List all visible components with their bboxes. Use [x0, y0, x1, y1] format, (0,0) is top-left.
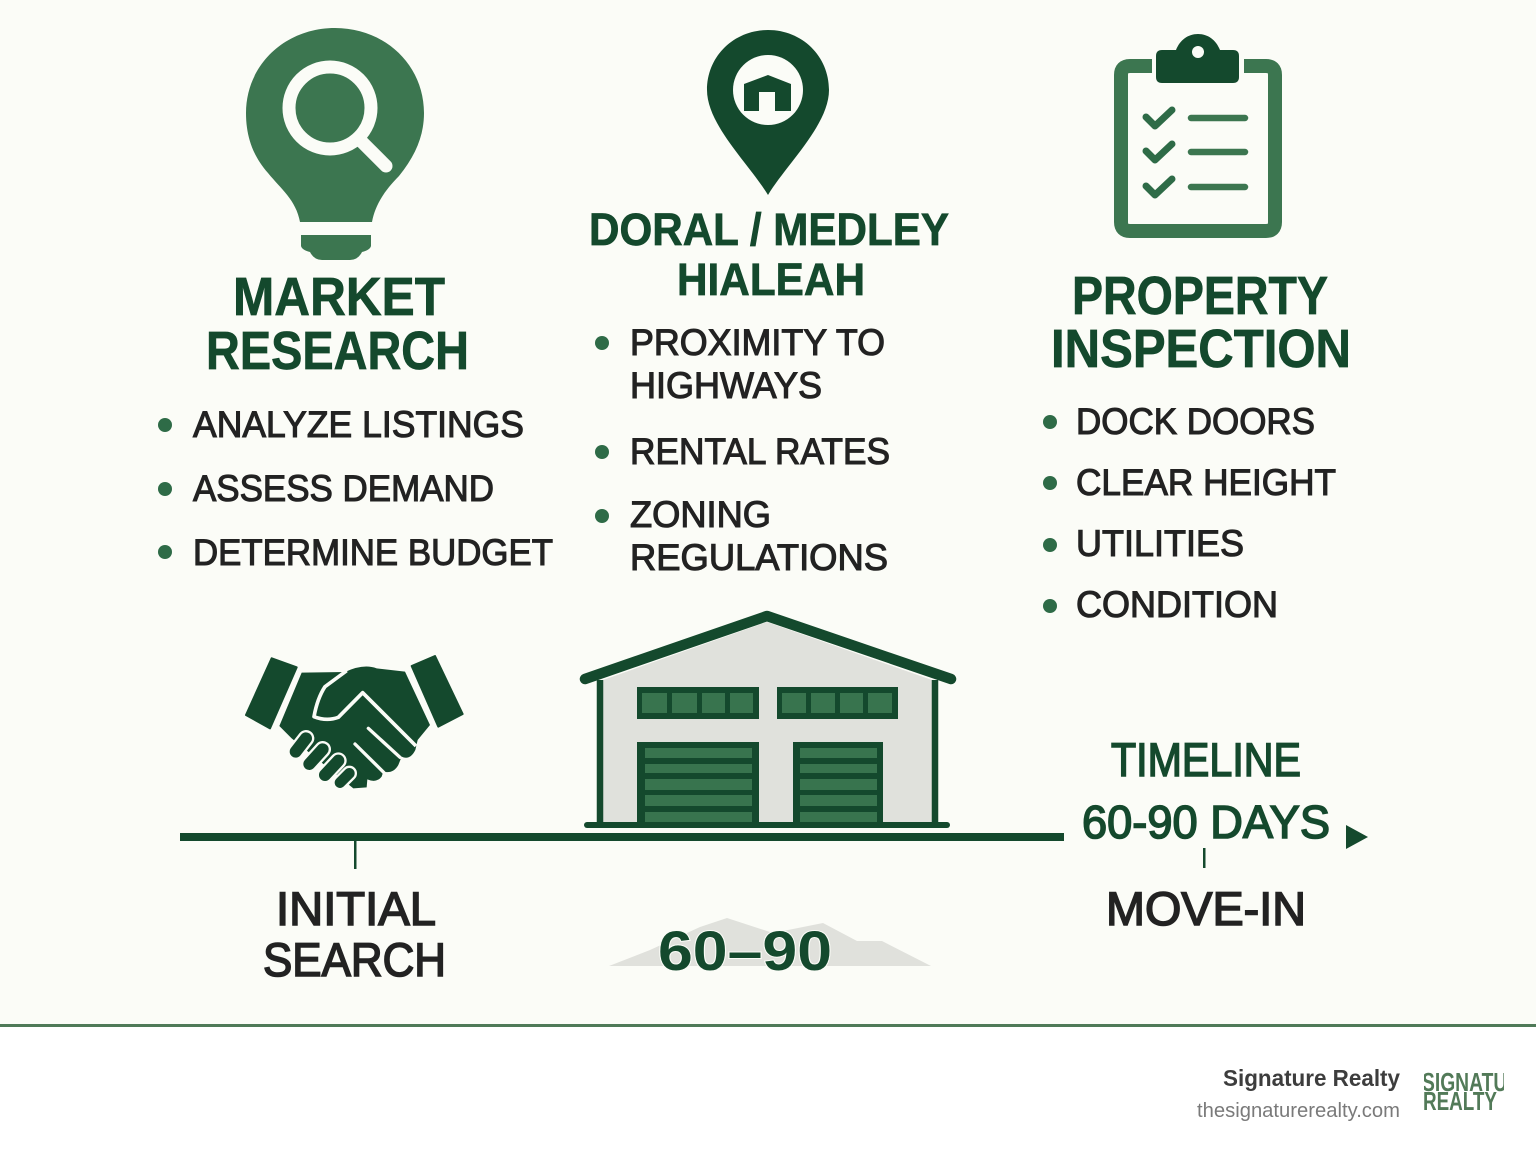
list: inspection items: CONDITION [1076, 584, 1278, 625]
label: timeline 60-90 days: TIMELINE [1111, 733, 1301, 786]
warehouse windows [637, 687, 898, 719]
heading: property inspection [1051, 266, 1351, 379]
panel: location [589, 30, 949, 578]
list: location items: PROXIMITY TO [630, 322, 885, 363]
list: location items: RENTAL RATES [630, 431, 890, 472]
label: initial search [263, 882, 446, 986]
list: location items: ZONING [630, 494, 771, 535]
heading: doral medley hialeah: HIALEAH [677, 254, 865, 305]
label: timeline 60-90 days [1082, 733, 1330, 848]
panel: property inspection [1043, 34, 1351, 625]
list: market research items [158, 404, 553, 573]
warehouse doors [637, 742, 883, 823]
icon: map pin with warehouse [707, 30, 829, 195]
icon: warehouse [585, 616, 951, 825]
list: inspection items [1043, 401, 1336, 625]
timeline axis [180, 833, 1206, 869]
label: initial search: SEARCH [263, 933, 446, 986]
label: move-in: MOVE-IN [1106, 882, 1306, 935]
label: initial search: INITIAL [276, 882, 436, 935]
label: timeline 60-90 days: 60-90 DAYS [1082, 796, 1330, 848]
icon: light bulb with magnifier [246, 28, 424, 260]
heading: property inspection: PROPERTY [1072, 266, 1328, 326]
panel: market research [158, 28, 553, 573]
list: inspection items: DOCK DOORS [1076, 401, 1315, 442]
icon: handshake [246, 656, 463, 788]
footer logo: REALTY [1423, 1086, 1497, 1116]
list: location items: HIGHWAYS [630, 365, 822, 406]
list: inspection items: UTILITIES [1076, 523, 1244, 564]
list: market research items: ANALYZE LISTINGS [193, 404, 524, 445]
footer brand text: Signature Realty [1223, 1065, 1400, 1091]
duration marker: 60-90 [609, 918, 931, 982]
list: inspection items: CLEAR HEIGHT [1076, 462, 1336, 503]
list: market research items: ASSESS DEMAND [193, 468, 494, 509]
heading: market research [206, 267, 469, 381]
heading: doral medley hialeah [589, 204, 949, 305]
list: location items [595, 322, 890, 578]
footer [0, 1024, 1536, 1121]
heading: property inspection: INSPECTION [1051, 319, 1351, 379]
heading: market research: RESEARCH [206, 321, 469, 381]
list: location items: REGULATIONS [630, 537, 888, 578]
icon: clipboard checklist [1121, 34, 1275, 231]
heading: market research: MARKET [233, 267, 445, 327]
arrow: timeline end [1346, 825, 1368, 849]
heading: doral medley hialeah: DORAL / MEDLEY [589, 204, 949, 255]
footer brand text: thesignaturerealty.com [1197, 1100, 1400, 1122]
list: market research items: DETERMINE BUDGET [193, 532, 553, 573]
footer brand text [1197, 1065, 1400, 1122]
footer logo [1424, 1072, 1504, 1110]
duration marker: 60-90: 60–90 [658, 919, 832, 982]
